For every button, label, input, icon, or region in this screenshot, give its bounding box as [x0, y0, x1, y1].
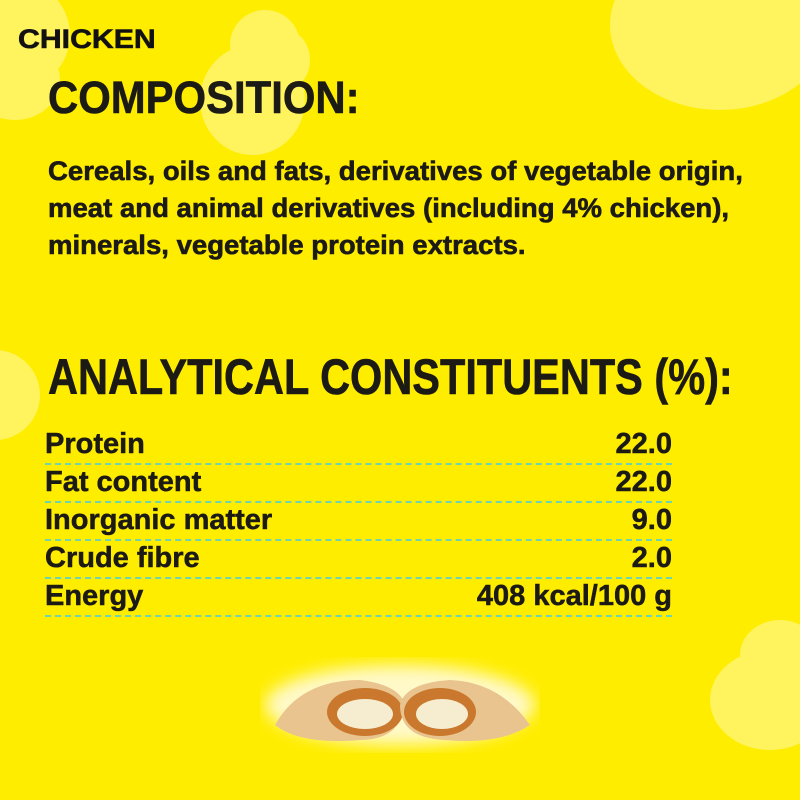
row: fibre: 2.0: [632, 542, 672, 574]
row: inorganic: [45, 501, 672, 541]
text block: composition ingredients: meat and animal derivatives (including 4% chicken),: [48, 193, 729, 223]
row: fat: [45, 463, 672, 503]
row: fibre: Crude fibre: [45, 542, 200, 574]
row: fibre: [45, 539, 672, 579]
text block: composition ingredients: [48, 156, 743, 260]
row: protein: Protein: [45, 428, 145, 460]
row: protein: 22.0: [616, 428, 672, 460]
table: analytical constituents: [45, 428, 672, 617]
row: inorganic: Inorganic matter: [45, 504, 272, 536]
heading: analytical constituents: ANALYTICAL CONSTITUENTS (%):: [48, 349, 733, 405]
row: energy: Energy: [45, 580, 143, 612]
text block: composition ingredients: minerals, vegetable protein extracts.: [48, 230, 526, 260]
row: inorganic: 9.0: [632, 504, 672, 536]
text block: composition ingredients: Cereals, oils and fats, derivatives of vegetable origin,: [48, 156, 743, 186]
row: energy: [45, 577, 672, 617]
heading: composition: COMPOSITION:: [48, 72, 360, 123]
image: kibble pieces: [260, 657, 540, 753]
label: chicken: CHICKEN: [18, 24, 156, 54]
row: energy: 408 kcal/100 g: [477, 580, 672, 612]
row: fat: Fat content: [45, 466, 201, 498]
row: fat: 22.0: [616, 466, 672, 498]
row: protein: [45, 425, 672, 465]
